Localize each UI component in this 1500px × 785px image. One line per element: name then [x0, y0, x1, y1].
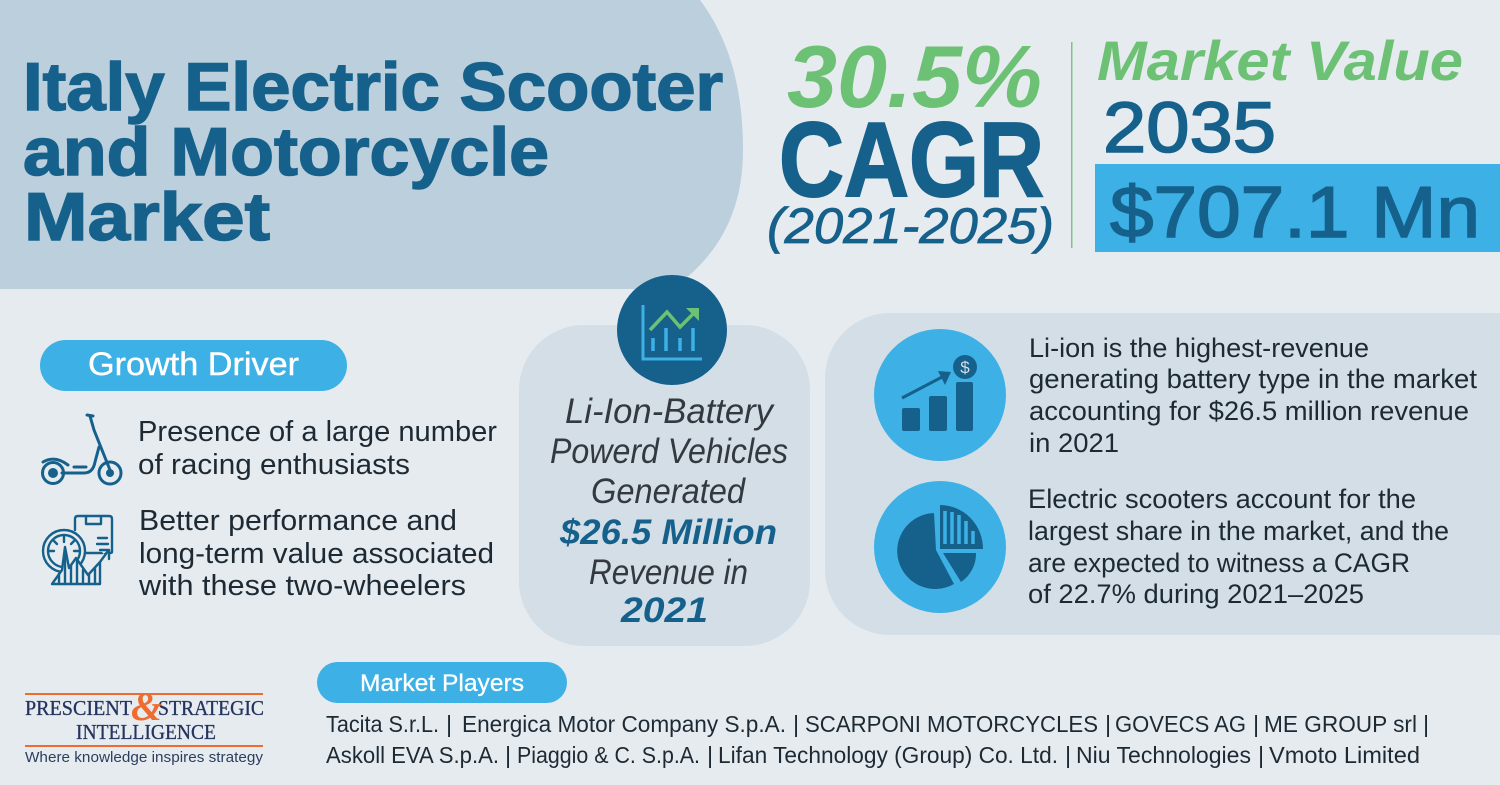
text: li-ion insight: generating battery type in the market: [1029, 364, 1478, 394]
market value block: Market Value: [1097, 29, 1463, 92]
title: [23, 49, 723, 255]
market players list: ME GROUP srl: [1264, 711, 1417, 737]
text: growth driver two: long-term value associated: [139, 538, 494, 570]
text: li-ion revenue: Powerd Vehicles: [550, 432, 788, 471]
growth driver pill: [40, 340, 347, 391]
market players list: Lifan Technology (Group) Co. Ltd.: [718, 742, 1058, 768]
text: scooter insight: [1028, 484, 1449, 609]
CAGR block: 30.5%: [787, 27, 1042, 126]
CAGR block: (2021-2025): [767, 198, 1054, 254]
text: li-ion insight: accounting for $26.5 million revenue: [1029, 396, 1469, 426]
market players list: GOVECS AG: [1115, 711, 1246, 737]
text: growth driver one: [138, 416, 497, 481]
market players list: Askoll EVA S.p.A.: [326, 742, 499, 768]
icon: pie chart: [874, 481, 1006, 613]
text: li-ion revenue: Revenue in: [589, 553, 748, 592]
market players list: Tacita S.r.L.: [326, 711, 439, 737]
market value block: $707.1 Mn: [1110, 173, 1480, 253]
text: li-ion insight: Li-ion is the highest-revenue: [1029, 333, 1369, 363]
icon: scooter: [42, 415, 121, 484]
growth driver pill: Growth Driver: [88, 346, 299, 382]
title: Market: [24, 179, 270, 255]
text: growth driver two: Better performance and: [139, 505, 457, 537]
text: growth driver two: [138, 505, 494, 602]
CAGR block: [767, 27, 1054, 254]
market players pill: [317, 662, 567, 703]
market players list: |: [793, 711, 799, 737]
vertical divider: [1071, 42, 1072, 248]
market players list: |: [1423, 711, 1429, 737]
title: and Motorcycle: [23, 114, 549, 190]
text: li-ion revenue: 2021: [620, 591, 708, 630]
text: growth driver one: of racing enthusiasts: [138, 449, 410, 481]
market players pill: Market Players: [360, 670, 524, 697]
market value block: [1095, 29, 1500, 253]
logo: prescient and strategic intelligence: [25, 684, 264, 766]
market players list: |: [707, 742, 713, 768]
icon: gauge box chart: [43, 516, 112, 584]
text: li-ion revenue: Li-Ion-Battery: [565, 392, 775, 431]
text: li-ion revenue: [550, 392, 788, 630]
market players list: SCARPONI MOTORCYCLES: [805, 711, 1098, 737]
icon: revenue growth: [874, 329, 1006, 461]
text: growth driver two: with these two-wheelers: [138, 570, 466, 602]
panel: title background: [0, 0, 743, 289]
logo: prescient and strategic intelligence: STRATEGIC: [158, 696, 264, 720]
text: li-ion insight: in 2021: [1029, 428, 1119, 458]
market players list: |: [1105, 711, 1111, 737]
text: scooter insight: of 22.7% during 2021–2025: [1028, 579, 1364, 609]
text: scooter insight: Electric scooters account for the: [1028, 484, 1416, 514]
panel: insights: [825, 313, 1500, 635]
market players list: |: [446, 711, 452, 737]
market players list: Vmoto Limited: [1269, 742, 1420, 768]
text: scooter insight: are expected to witness a CAGR: [1028, 548, 1410, 578]
text: li-ion revenue: $26.5 Million: [559, 513, 777, 552]
text: scooter insight: largest share in the market, and the: [1028, 516, 1449, 546]
market players list: |: [1065, 742, 1071, 768]
market players list: |: [505, 742, 511, 768]
panel: li-ion revenue: [519, 325, 810, 646]
market players list: Energica Motor Company S.p.A.: [462, 711, 786, 737]
logo: prescient and strategic intelligence: &: [131, 684, 162, 729]
market players list: |: [1258, 742, 1264, 768]
market players list: Piaggio & C. S.p.A.: [517, 742, 700, 768]
CAGR block: CAGR: [779, 101, 1044, 219]
text: li-ion revenue: Generated: [591, 472, 746, 511]
logo: prescient and strategic intelligence: INTELLIGENCE: [76, 720, 216, 744]
icon: revenue growth: $: [960, 358, 970, 377]
title: Italy Electric Scooter: [23, 49, 723, 125]
market players list: |: [1253, 711, 1259, 737]
market players list: [326, 711, 1429, 768]
logo: prescient and strategic intelligence: PRESCIENT: [25, 696, 132, 720]
logo: prescient and strategic intelligence: Where knowledge inspires strategy: [25, 749, 264, 766]
icon: rising chart: [617, 275, 727, 385]
market players list: Niu Technologies: [1076, 742, 1251, 768]
text: growth driver one: Presence of a large number: [138, 416, 497, 448]
market value block: 2035: [1103, 89, 1276, 168]
text: li-ion insight: [1029, 333, 1478, 458]
